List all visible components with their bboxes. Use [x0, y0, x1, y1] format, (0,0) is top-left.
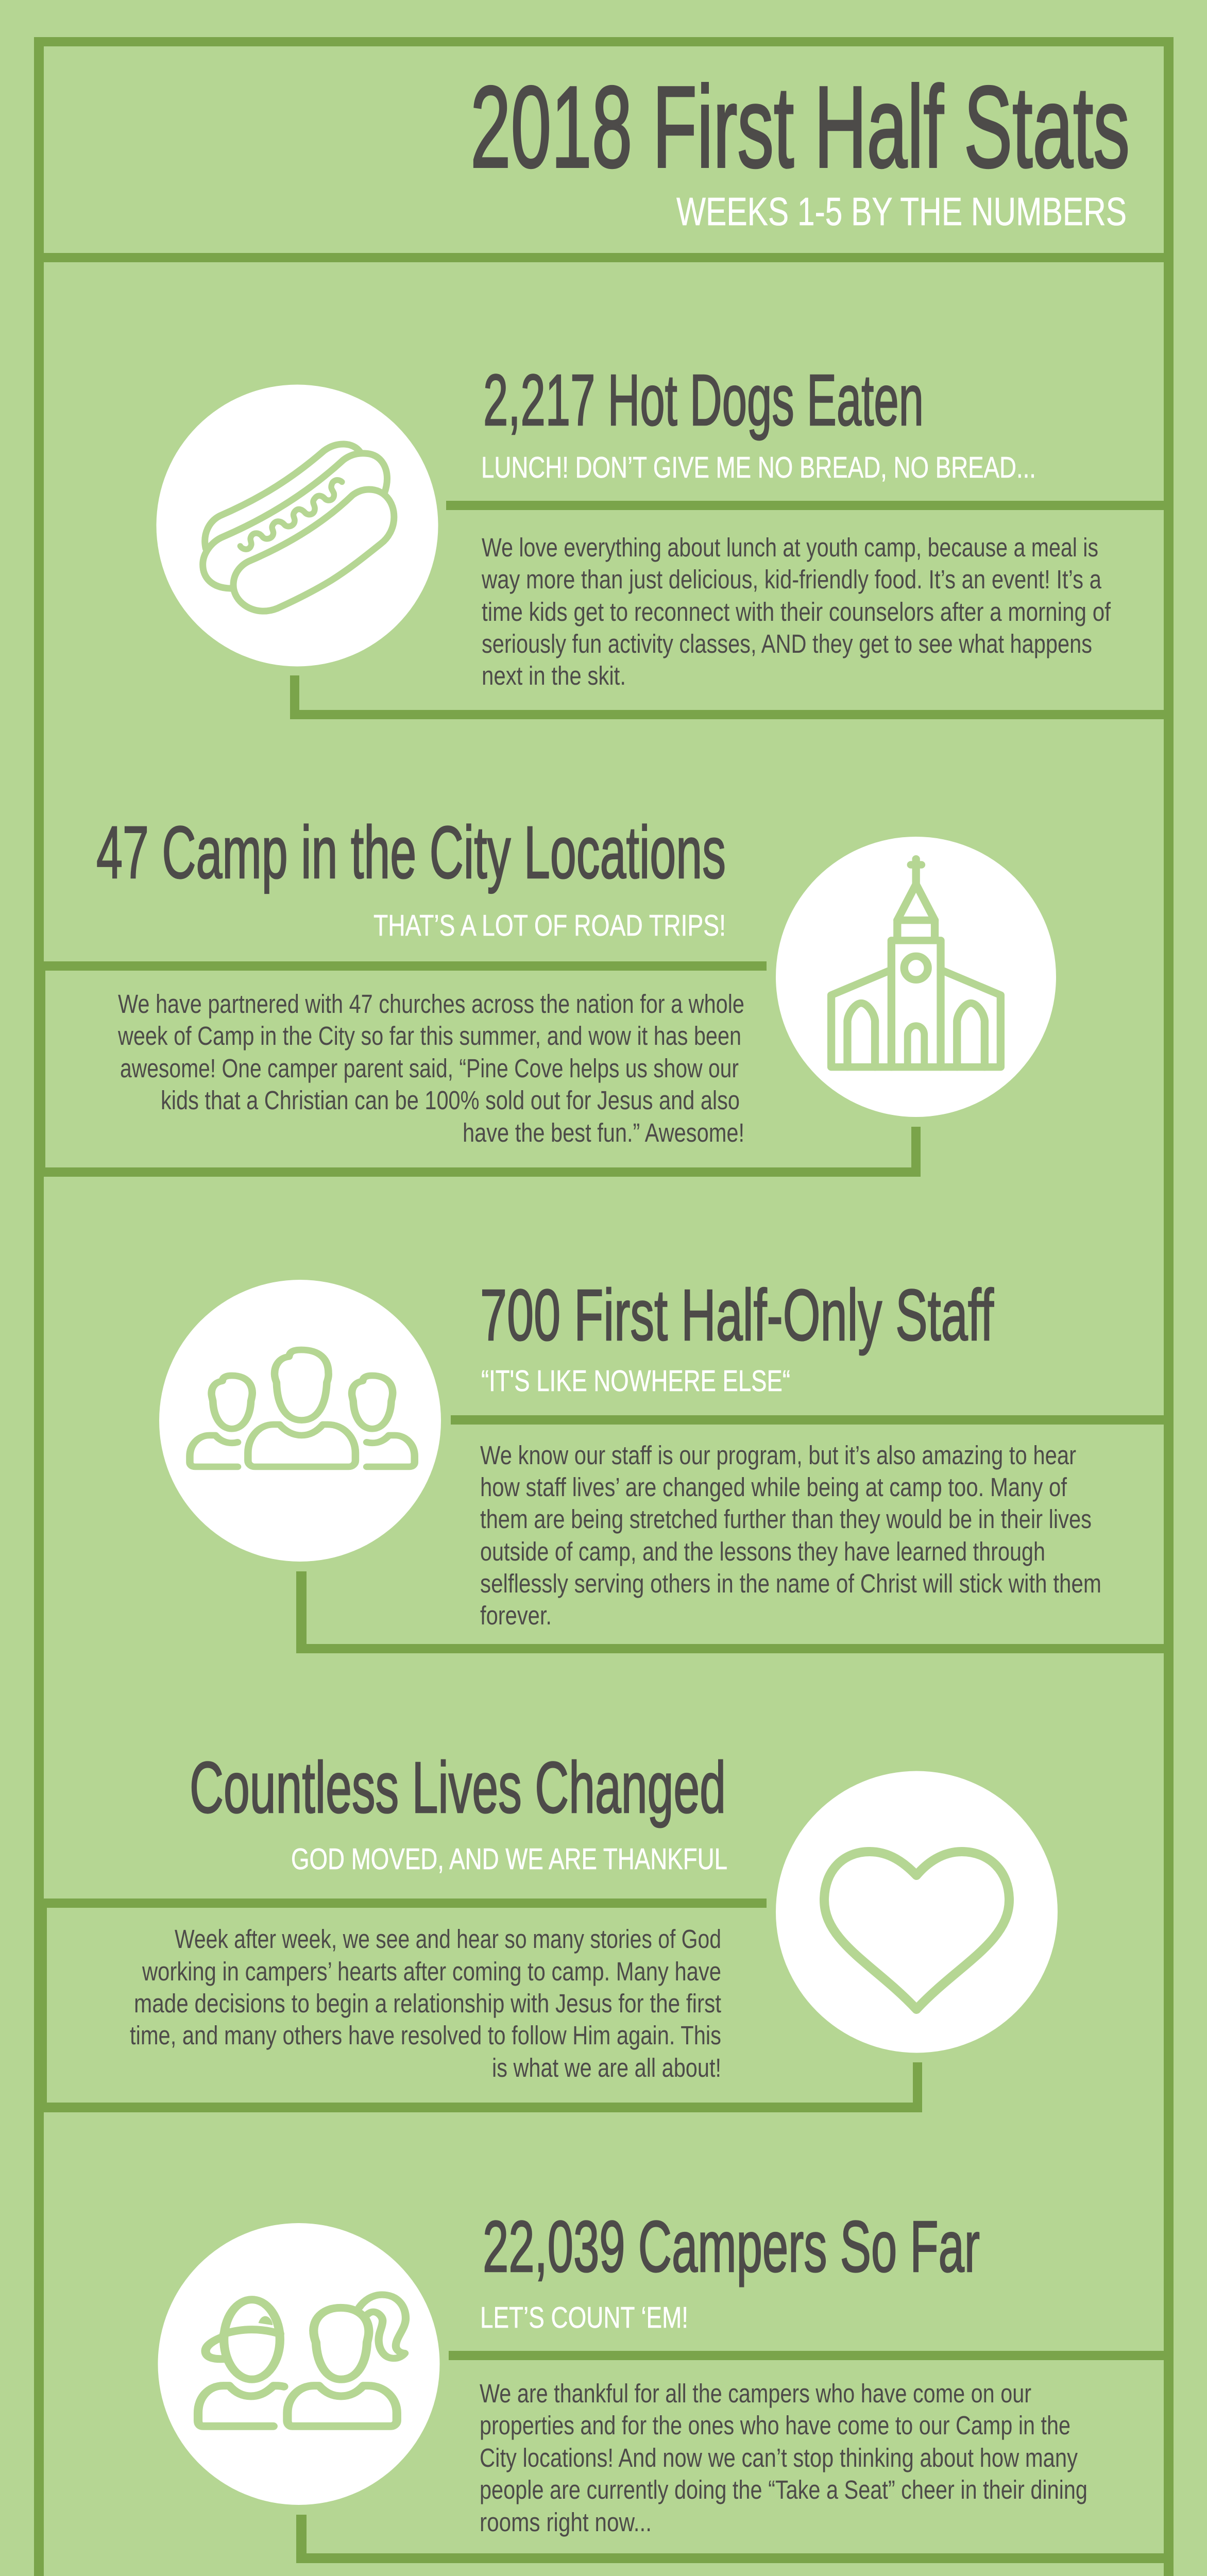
body text: lives changed: working in campers’ hearts after coming to camp. Many have	[142, 1957, 721, 1986]
body text: lives changed: time, and many others have resolved to follow Him again. This	[130, 2021, 721, 2050]
body text: campers: people are currently doing the “Take a Seat” cheer in their dining	[480, 2475, 1087, 2504]
connector: lives changed	[34, 2062, 922, 2112]
body text: campers: We are thankful for all the campers who have come on our	[480, 2379, 1031, 2408]
connector: campers	[296, 2515, 1164, 2563]
body text: campers: properties and for the ones who have come to our Camp in the	[480, 2411, 1070, 2440]
panel: lives changed	[34, 1747, 1058, 2112]
panel: campers	[158, 2206, 1164, 2563]
body text: locations: have the best fun.” Awesome!	[463, 1118, 744, 1147]
body text: campers	[480, 2379, 1087, 2537]
body text: lives changed: is what we are all about!	[492, 2053, 721, 2082]
body text: locations: awesome! One camper parent said, “Pine Cove helps us show our	[120, 1054, 739, 1083]
subheading: hot dogs: LUNCH! DON’T GIVE ME NO BREAD, NO BREAD...	[481, 451, 1036, 484]
body text: locations: week of Camp in the City so far this summer, and wow it has been	[117, 1021, 741, 1050]
body text: lives changed	[130, 1924, 721, 2082]
icon: church in white circle	[776, 837, 1056, 1117]
heading: hot dogs: 2,217 Hot Dogs Eaten	[483, 359, 924, 440]
rule under subheading	[446, 501, 1164, 510]
connector: staff	[296, 1571, 1164, 1653]
body text: locations	[117, 989, 744, 1147]
connector: hot dogs	[290, 675, 1164, 719]
body text: hot dogs	[481, 533, 1111, 690]
body text: lives changed: made decisions to begin a relationship with Jesus for the first	[134, 1989, 721, 2018]
rule under subheading	[451, 1415, 1164, 1425]
heading: locations: 47 Camp in the City Locations	[96, 811, 726, 894]
panel: hot dogs	[157, 359, 1164, 719]
rule under subheading	[449, 2351, 1164, 2360]
body text: staff	[480, 1440, 1101, 1630]
panel: staff	[159, 1274, 1164, 1653]
icon: three people in white circle	[159, 1280, 441, 1562]
icon: two campers in white circle	[158, 2223, 440, 2505]
body text: campers: rooms right now...	[480, 2507, 652, 2537]
rule under subheading	[34, 961, 767, 971]
panel: camp in the city	[34, 811, 1056, 1177]
heading: lives changed: Countless Lives Changed	[190, 1747, 726, 1828]
subheading: campers: LET’S COUNT ‘EM!	[480, 2301, 688, 2334]
body text: locations: We have partnered with 47 churches across the nation for a whole	[118, 989, 744, 1019]
icon: hot dog in white circle	[157, 384, 438, 667]
body text: staff: We know our staff is our program, but it’s also amazing to hear	[480, 1440, 1076, 1470]
subheading: lives changed: GOD MOVED, AND WE ARE THANKFUL	[291, 1842, 727, 1876]
subheading: staff: “IT'S LIKE NOWHERE ELSE“	[481, 1364, 790, 1398]
rule under subheading	[34, 1899, 767, 1908]
body text: lives changed: Week after week, we see and hear so many stories of God	[175, 1924, 721, 1954]
body text: staff: how staff lives’ are changed while being at camp too. Many of	[480, 1472, 1067, 1502]
body text: staff: them are being stretched further than they would be in their lives	[480, 1504, 1092, 1534]
header: title block	[470, 62, 1130, 234]
subheading: locations: THAT’S A LOT OF ROAD TRIPS!	[373, 909, 726, 942]
icon: heart in white circle	[776, 1771, 1058, 2053]
body text: campers: City locations! And now we can’t stop thinking about how many	[480, 2443, 1078, 2472]
body text: hot dogs: next in the skit.	[482, 661, 626, 690]
connector: locations	[34, 1127, 921, 1177]
body text: locations: kids that a Christian can be 100% sold out for Jesus and also	[161, 1086, 740, 1115]
body text: staff: forever.	[480, 1601, 552, 1630]
body text: staff: outside of camp, and the lessons they have learned through	[480, 1537, 1045, 1566]
